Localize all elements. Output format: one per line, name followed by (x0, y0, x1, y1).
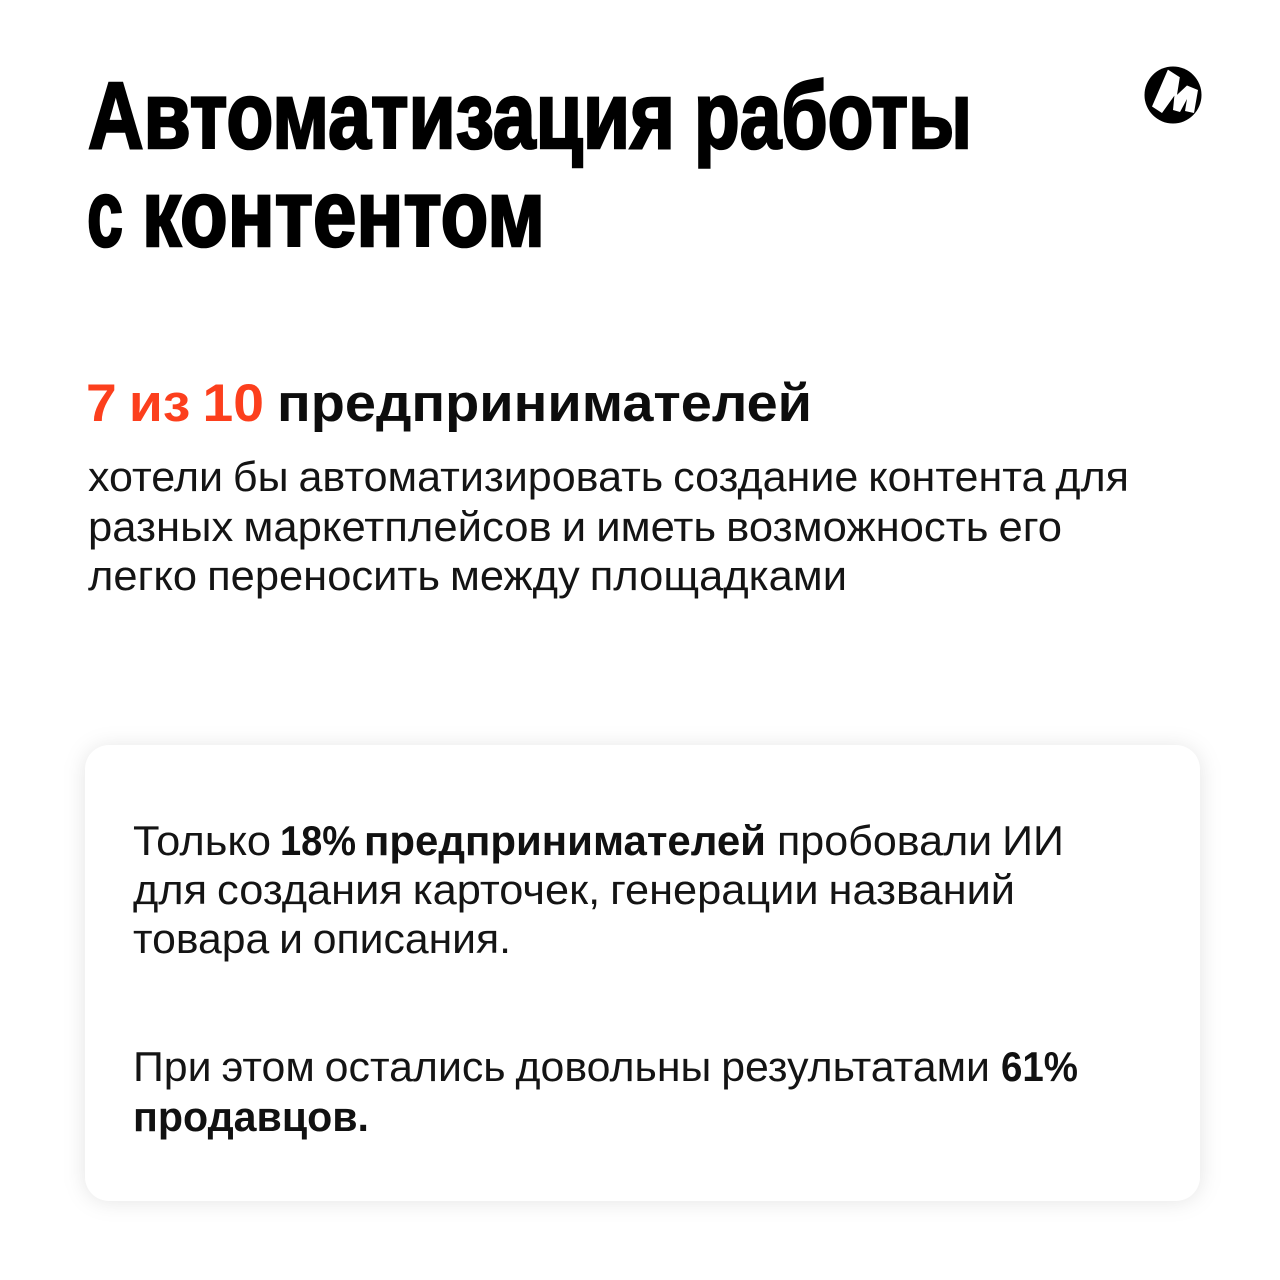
text block: 18% of sellers: 18% (280, 817, 356, 864)
title: с (87, 161, 123, 267)
text block: 18% of sellers: пробовали ИИ (777, 817, 1064, 864)
text block: 61% of sellers: 61% (1001, 1043, 1078, 1090)
text block: 18% of sellers: предпринимателей (364, 817, 766, 864)
text block: intro: разных маркетплейсов и иметь возможность его (88, 503, 1062, 550)
text block: 18% of sellers: товара и описания. (133, 915, 511, 962)
panel: statistics card (85, 745, 1200, 1201)
heading: 7 из 10 предпринимателей: предпринимателей (277, 374, 812, 433)
heading: 7 из 10 предпринимателей (86, 374, 812, 433)
title: Автоматизация (88, 63, 675, 169)
text block: intro: хотели бы автоматизировать создание контента для (88, 453, 1129, 500)
text block: 61% of sellers (133, 1043, 1078, 1140)
heading: 7 из 10 предпринимателей: 7 из 10 (86, 374, 264, 433)
text block: 61% of sellers: При этом остались довольны результатами (133, 1043, 990, 1090)
title (87, 63, 972, 267)
text block: 18% of sellers: для создания карточек, генерации названий (133, 866, 1015, 913)
text block: 18% of sellers: Только (133, 817, 271, 864)
text block: 18% of sellers (133, 817, 1064, 962)
text block: 61% of sellers: продавцов. (133, 1093, 369, 1140)
title: контентом (142, 161, 545, 267)
icon: market logo (1144, 66, 1202, 124)
text block: intro (88, 453, 1129, 599)
text block: intro: легко переносить между площадками (88, 552, 847, 599)
title: работы (694, 63, 972, 169)
